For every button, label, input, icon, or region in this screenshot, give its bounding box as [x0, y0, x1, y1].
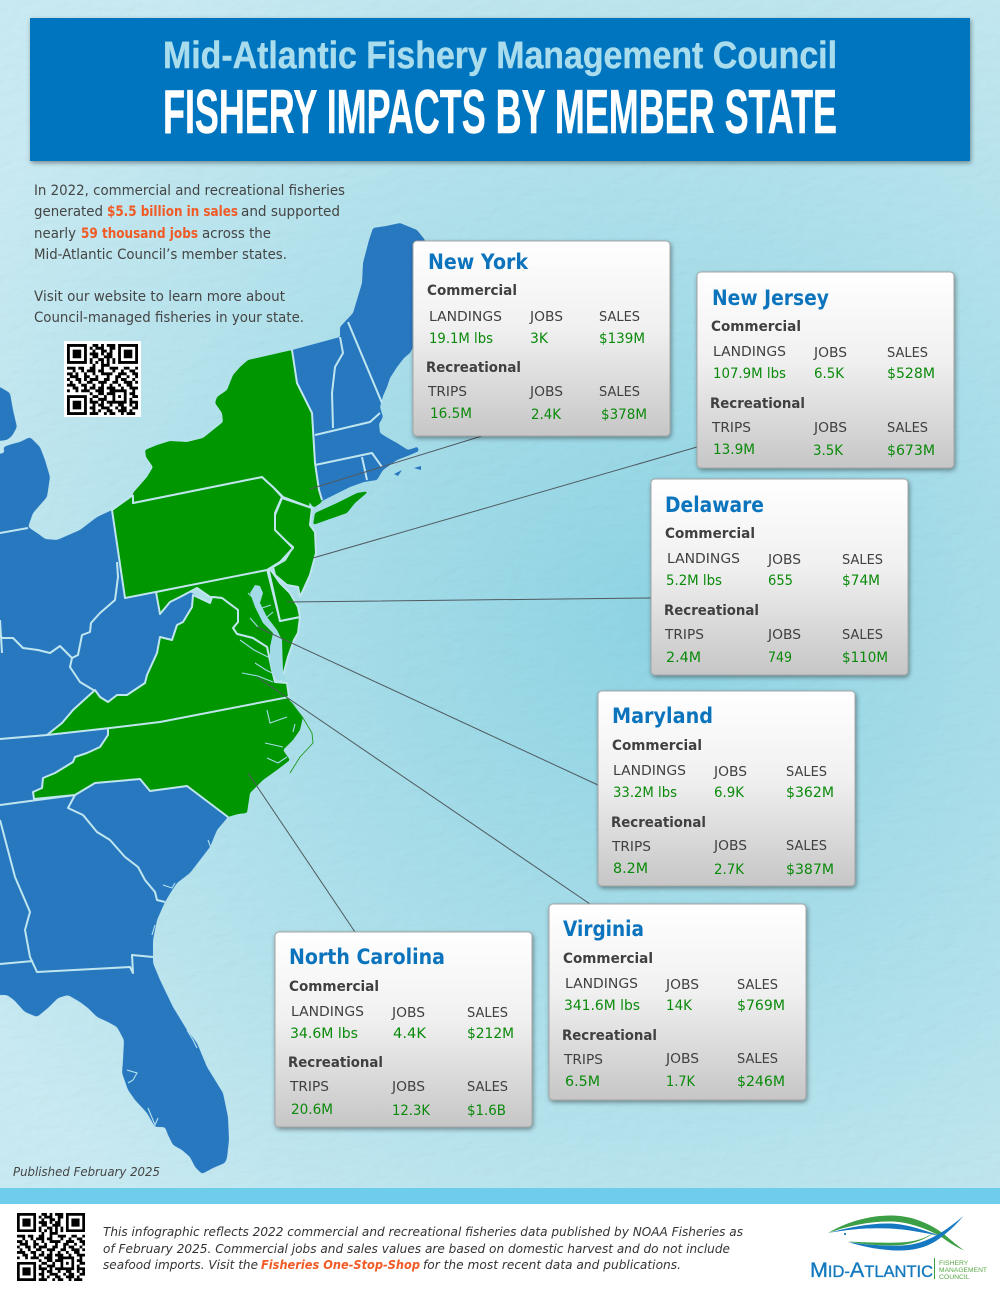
state: Delaware: [268, 567, 300, 621]
recreational stats: SALES: [599, 384, 640, 400]
recreational stats: TRIPS: [563, 1052, 603, 1068]
intro text: Mid-Atlantic Council’s member states.: [34, 247, 287, 263]
intro text: across the: [202, 226, 271, 242]
card heading: Maryland: [612, 704, 713, 729]
commercial stats: [711, 319, 935, 382]
commercial stats: JOBS: [529, 309, 563, 325]
recreational stats: JOBS: [665, 1051, 699, 1067]
recreational stats: Recreational: [426, 360, 521, 376]
commercial stats: 6.5K: [814, 366, 845, 382]
land: Mid-West and South: [0, 387, 229, 1174]
state: Virginia: [47, 595, 289, 735]
commercial stats: [612, 738, 834, 801]
commercial stats: [563, 951, 785, 1014]
intro text: Visit our website to learn more about: [34, 289, 285, 305]
recreational stats: [562, 1028, 785, 1090]
commercial stats: 655: [768, 573, 793, 589]
commercial stats: Commercial: [427, 283, 517, 299]
recreational stats: [611, 815, 834, 878]
islands off Massachusetts: [394, 466, 421, 476]
card: New Jersey: [697, 272, 954, 468]
commercial stats: $528M: [887, 366, 935, 382]
recreational stats: $246M: [737, 1074, 785, 1090]
commercial stats: Commercial: [563, 951, 653, 967]
commercial stats: SALES: [842, 552, 883, 568]
recreational stats: 2.7K: [714, 862, 745, 878]
QR code: footer: [17, 1213, 85, 1281]
logo subtitle: COUNCIL: [939, 1274, 970, 1281]
recreational stats: 13.9M: [713, 442, 755, 458]
recreational stats: $378M: [601, 407, 647, 423]
commercial stats: JOBS: [813, 345, 847, 361]
intro text: [34, 183, 345, 326]
logo: Mid-Atlantic Fishery Management Council: [810, 1215, 987, 1282]
recreational stats: JOBS: [813, 420, 847, 436]
commercial stats: 341.6M lbs: [564, 998, 640, 1014]
commercial stats: 6.9K: [714, 785, 745, 801]
commercial stats: 3K: [530, 331, 549, 347]
title line: council name: Mid-Atlantic Fishery Management Council: [163, 35, 837, 77]
commercial stats: [427, 283, 645, 347]
intro text: generated: [34, 204, 103, 220]
commercial stats: JOBS: [767, 552, 801, 568]
card heading: New Jersey: [712, 286, 829, 311]
state: New York: [133, 350, 369, 525]
state borders: blue states: [0, 322, 382, 973]
commercial stats: SALES: [737, 977, 778, 993]
recreational stats: TRIPS: [427, 384, 467, 400]
intro text: 59 thousand jobs: [81, 226, 198, 242]
intro text: nearly: [34, 226, 76, 242]
Chesapeake Bay and rivers: [240, 585, 285, 682]
logo subtitle: [939, 1260, 987, 1281]
publication date: Published February 2025: [13, 1164, 160, 1179]
recreational stats: Recreational: [611, 815, 706, 831]
recreational stats: $110M: [842, 650, 888, 666]
commercial stats: [289, 979, 514, 1042]
commercial stats: 14K: [666, 998, 693, 1014]
intro text: In 2022, commercial and recreational fisheries: [34, 183, 345, 199]
state: Pennsylvania: [112, 477, 293, 598]
intro text: and supported: [241, 204, 340, 220]
recreational stats: JOBS: [767, 627, 801, 643]
leader lines: [248, 436, 697, 932]
logo subtitle: FISHERY: [939, 1260, 969, 1267]
card: Virginia: [549, 904, 806, 1100]
commercial stats: $769M: [737, 998, 785, 1014]
recreational stats: Recreational: [562, 1028, 657, 1044]
commercial stats: LANDINGS: [713, 344, 786, 360]
commercial stats: $362M: [786, 785, 834, 801]
recreational stats: SALES: [887, 420, 928, 436]
commercial stats: JOBS: [665, 977, 699, 993]
commercial stats: SALES: [599, 309, 640, 325]
map of eastern United States: [0, 223, 425, 1174]
recreational stats: 2.4M: [666, 650, 701, 666]
commercial stats: LANDINGS: [667, 551, 740, 567]
recreational stats: SALES: [842, 627, 883, 643]
recreational stats: JOBS: [391, 1079, 425, 1095]
commercial stats: 33.2M lbs: [613, 785, 677, 801]
recreational stats: JOBS: [529, 384, 563, 400]
footer panel: [0, 1204, 1000, 1294]
header banner: [30, 18, 970, 161]
card heading: Virginia: [563, 917, 644, 942]
recreational stats: TRIPS: [664, 627, 704, 643]
recreational stats: TRIPS: [289, 1079, 329, 1095]
footer note: Fisheries One-Stop-Shop: [261, 1257, 420, 1272]
card: New York: [413, 241, 670, 436]
recreational stats: 12.3K: [392, 1103, 431, 1119]
commercial stats: JOBS: [713, 764, 747, 780]
commercial stats: JOBS: [391, 1005, 425, 1021]
recreational stats: SALES: [467, 1079, 508, 1095]
card heading: New York: [428, 250, 529, 275]
recreational stats: 6.5M: [565, 1074, 600, 1090]
card heading: North Carolina: [289, 945, 445, 970]
logo divider: [934, 1258, 935, 1279]
commercial stats: 4.4K: [393, 1026, 427, 1042]
recreational stats: Recreational: [288, 1055, 383, 1071]
commercial stats: Commercial: [665, 526, 755, 542]
state: New Jersey: [273, 498, 316, 597]
intro text: $5.5 billion in sales: [107, 204, 238, 220]
card: Maryland: [598, 691, 855, 886]
card: Delaware: [651, 479, 908, 675]
commercial stats: LANDINGS: [613, 763, 686, 779]
recreational stats: TRIPS: [711, 420, 751, 436]
footer note: This infographic reflects 2022 commercial and recreational fisheries data published by NOAA Fisheries as: [103, 1224, 743, 1239]
recreational stats: 1.7K: [666, 1074, 696, 1090]
commercial stats: $74M: [842, 573, 880, 589]
commercial stats: SALES: [887, 345, 928, 361]
recreational stats: TRIPS: [611, 839, 651, 855]
intro text: Council-managed fisheries in your state.: [34, 310, 304, 326]
recreational stats: Recreational: [664, 603, 759, 619]
state: Maryland: [156, 569, 300, 680]
commercial stats: SALES: [786, 764, 827, 780]
recreational stats: 20.6M: [291, 1102, 333, 1118]
North Carolina sounds: [265, 710, 295, 763]
commercial stats: 107.9M lbs: [713, 366, 786, 382]
land: New England: [292, 223, 425, 503]
footer note: [103, 1224, 743, 1272]
card heading: Delaware: [665, 493, 764, 518]
commercial stats: 34.6M lbs: [290, 1026, 358, 1042]
recreational stats: 8.2M: [613, 861, 648, 877]
recreational stats: Recreational: [710, 396, 805, 412]
commercial stats: $212M: [467, 1026, 514, 1042]
commercial stats: SALES: [467, 1005, 508, 1021]
commercial stats: LANDINGS: [429, 309, 502, 325]
footer note: seafood imports. Visit the: [103, 1257, 258, 1272]
card: North Carolina: [275, 932, 532, 1127]
commercial stats: $139M: [599, 331, 645, 347]
QR code: website: [64, 341, 141, 417]
recreational stats: 3.5K: [813, 443, 844, 459]
footer note: of February 2025. Commercial jobs and sales values are based on domestic harvest and do not include: [103, 1241, 730, 1256]
footer stripe: [0, 1188, 1000, 1204]
commercial stats: Commercial: [711, 319, 801, 335]
commercial stats: LANDINGS: [565, 976, 638, 992]
commercial stats: Commercial: [289, 979, 379, 995]
recreational stats: [426, 360, 647, 423]
commercial stats: 19.1M lbs: [429, 331, 493, 347]
North Carolina inland borders: [33, 728, 228, 817]
recreational stats: 2.4K: [531, 407, 562, 423]
commercial stats: 5.2M lbs: [666, 573, 722, 589]
logo fish mark: [828, 1215, 964, 1250]
New York border lines: [133, 350, 322, 508]
logo subtitle: MANAGEMENT: [939, 1267, 987, 1274]
logo wordmark: MID-ATLANTIC: [810, 1258, 933, 1282]
recreational stats: [664, 603, 888, 666]
commercial stats: Commercial: [612, 738, 702, 754]
Outer Banks: [290, 702, 313, 773]
recreational stats: SALES: [786, 838, 827, 854]
recreational stats: SALES: [737, 1051, 778, 1067]
recreational stats: $1.6B: [467, 1103, 506, 1119]
state: North Carolina: [33, 697, 303, 817]
commercial stats: LANDINGS: [291, 1004, 364, 1020]
recreational stats: $673M: [887, 443, 935, 459]
coastal inlets of the South: [127, 840, 211, 1125]
recreational stats: 749: [768, 650, 792, 666]
recreational stats: [710, 396, 935, 459]
recreational stats: $387M: [786, 862, 834, 878]
recreational stats: JOBS: [713, 838, 747, 854]
commercial stats: [665, 526, 883, 589]
footer note: for the most recent data and publications.: [423, 1257, 681, 1272]
recreational stats: [288, 1055, 508, 1119]
recreational stats: 16.5M: [430, 406, 472, 422]
